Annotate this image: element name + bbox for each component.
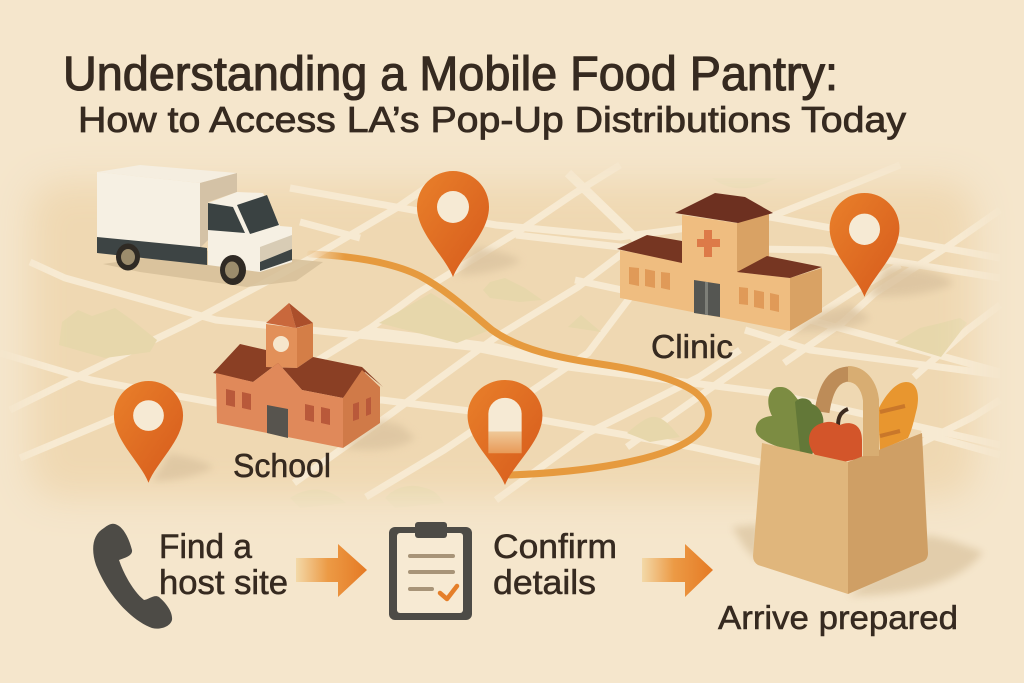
handle back	[822, 374, 850, 412]
icon: map pin lower left	[114, 381, 214, 483]
school tower	[266, 324, 297, 368]
title	[63, 48, 906, 140]
icon: phone	[93, 524, 172, 629]
cab	[208, 192, 292, 272]
label: clinic: Clinic	[651, 328, 733, 365]
delivery route line	[310, 254, 708, 475]
clinic cross	[697, 230, 720, 257]
icon: map pin right	[830, 193, 954, 297]
bag shadow	[732, 524, 983, 596]
arrow: step 1 to step 2	[296, 544, 367, 597]
step text: confirm details	[493, 528, 617, 602]
bag front and side	[753, 443, 848, 594]
clinic door	[694, 280, 720, 317]
street map	[21, 173, 984, 508]
title: Understanding a Mobile Food Pantry:	[63, 48, 838, 101]
step text: find a host site	[159, 528, 288, 602]
clinic lower wings	[620, 250, 790, 331]
label: school: School	[233, 447, 331, 484]
step text: confirm details: details	[493, 564, 596, 602]
checklist lines	[410, 556, 453, 589]
icon: map pin centre with filling marker	[468, 380, 542, 485]
icon: grocery bag	[732, 374, 983, 596]
school windows	[226, 389, 371, 425]
road grid	[0, 165, 1000, 500]
cargo box	[97, 165, 237, 183]
icon: school building	[213, 303, 415, 450]
leaves	[756, 387, 812, 455]
title: How to Access LA’s Pop-Up Distributions Today	[78, 99, 906, 140]
icon: clipboard	[389, 522, 472, 620]
step text: find a host site: Find a	[159, 528, 252, 566]
arrow: step 2 to step 3	[642, 544, 713, 597]
school door	[267, 405, 288, 438]
truck shadow	[103, 250, 323, 287]
apple	[838, 409, 848, 426]
step text: confirm details: Confirm	[493, 528, 617, 566]
green map patches	[110, 312, 962, 442]
school roof	[213, 344, 383, 398]
icon: clinic building	[617, 193, 870, 331]
icon: map pin top centre	[417, 171, 521, 277]
handle front	[848, 374, 871, 456]
step text: arrive prepared: Arrive prepared	[718, 599, 958, 636]
bread	[878, 382, 918, 450]
clinic centre block	[682, 215, 737, 290]
wheels	[116, 244, 140, 270]
check mark	[440, 586, 457, 599]
step text: find a host site: host site	[159, 564, 288, 602]
school walls	[216, 363, 343, 448]
icon: truck	[97, 165, 323, 287]
clinic windows	[629, 267, 779, 312]
